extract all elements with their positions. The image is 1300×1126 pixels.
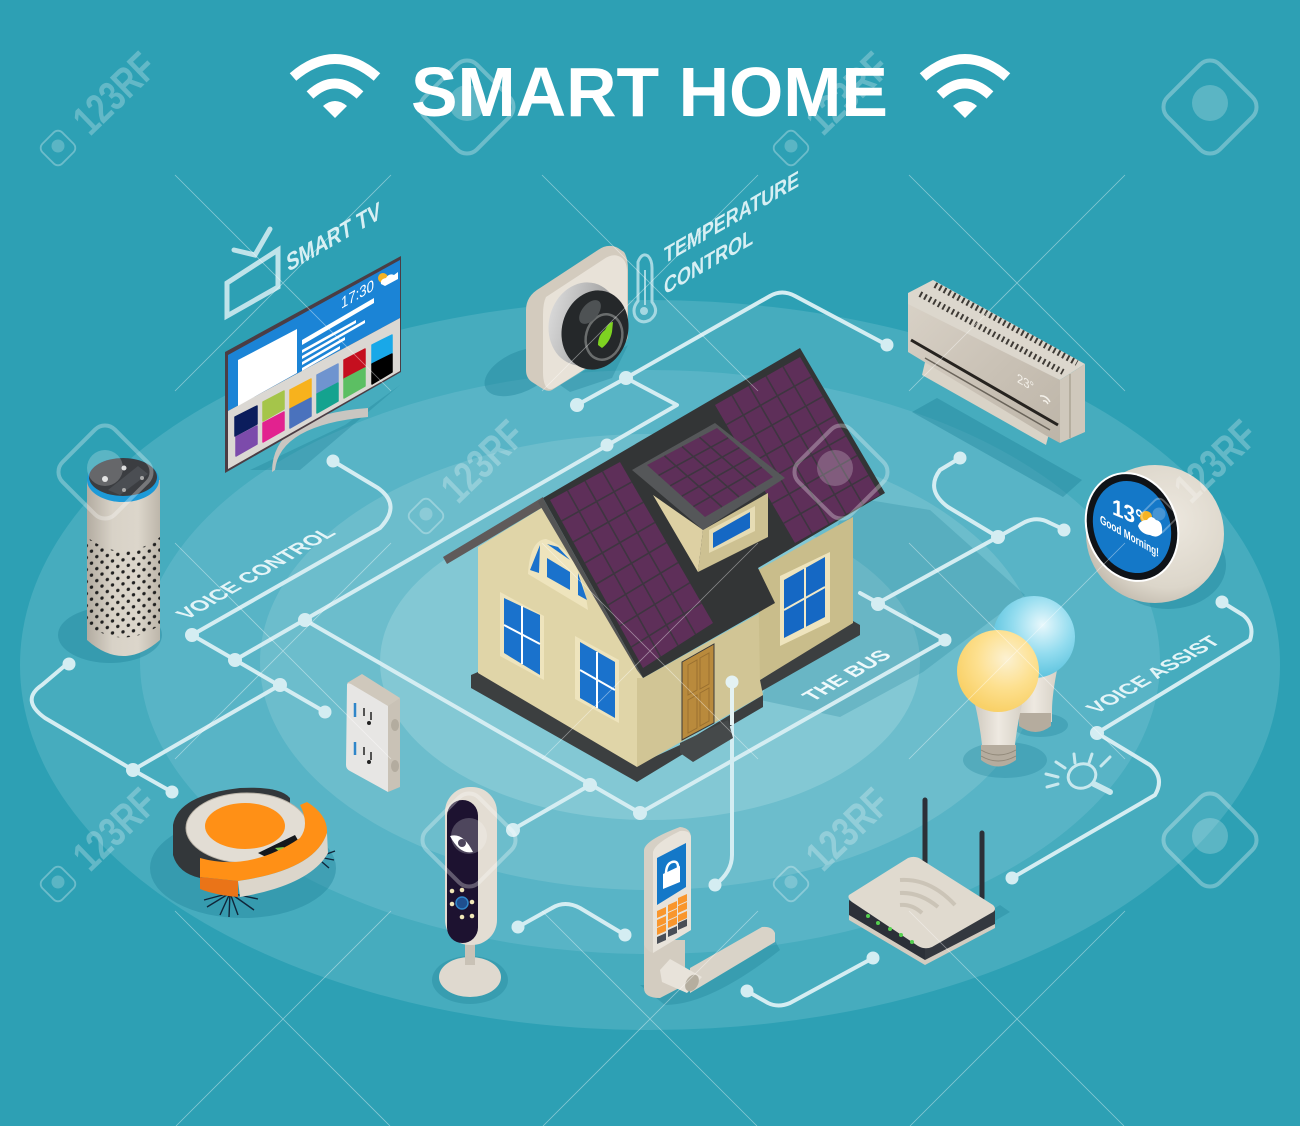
watermark: 123RF: 123RF bbox=[1165, 411, 1266, 511]
window bbox=[780, 552, 830, 646]
door bbox=[682, 644, 714, 740]
watermark: 123RF: 123RF bbox=[64, 779, 165, 879]
door dot bbox=[726, 676, 738, 688]
concentric floor ellipses bbox=[20, 300, 1280, 1030]
label: temperature control bbox=[664, 165, 799, 300]
device: smart display: Good Morning! bbox=[1100, 512, 1159, 560]
device: wall outlet bbox=[346, 674, 400, 792]
watermark: 123RF: 123RF bbox=[797, 779, 898, 879]
house bbox=[443, 348, 885, 782]
device: light bulb blue bbox=[993, 596, 1075, 737]
watermark: 123RF: 123RF bbox=[432, 411, 533, 511]
circuit lines bbox=[32, 292, 1251, 1006]
dormer bbox=[632, 423, 785, 572]
left roof eave bbox=[443, 497, 543, 564]
window bbox=[500, 592, 544, 680]
device: air conditioner: 23° bbox=[1017, 370, 1034, 395]
device: camera doorbell bbox=[432, 787, 508, 1004]
house walls bbox=[478, 507, 853, 767]
window bbox=[575, 636, 619, 723]
watermark logo centres bbox=[52, 85, 1228, 888]
device: smart display: 13° bbox=[1112, 493, 1143, 532]
watermark: 123RF bbox=[64, 43, 1266, 879]
label: the bus: THE BUS bbox=[797, 647, 897, 705]
device: thermostat bbox=[477, 246, 637, 406]
device: wifi router bbox=[848, 800, 1010, 965]
circuit nodes bbox=[62, 338, 1228, 998]
watermark: 123RF: 123RF bbox=[797, 43, 898, 143]
device: smart tv bbox=[225, 256, 401, 473]
device: light bulb yellow bbox=[957, 630, 1047, 778]
arched window bbox=[528, 539, 588, 610]
icon: wifi right bbox=[923, 59, 1007, 118]
house shadow bbox=[760, 497, 1025, 717]
diagonal watermark lines bbox=[175, 175, 1125, 1126]
title: SMART HOME bbox=[411, 53, 888, 131]
roof bbox=[538, 348, 885, 678]
device: smart door lock bbox=[640, 827, 780, 1005]
icon: thermometer bbox=[634, 255, 656, 322]
device: voice speaker bbox=[58, 458, 165, 663]
device: smart tv: 17:30 bbox=[341, 277, 374, 313]
label: temperature control: CONTROL bbox=[664, 222, 753, 300]
door steps bbox=[680, 720, 733, 762]
icon: wifi left bbox=[293, 59, 377, 118]
label: voice assist: VOICE ASSIST bbox=[1081, 633, 1226, 717]
icon: light search bbox=[1046, 754, 1110, 792]
device: robot vacuum bbox=[150, 788, 336, 918]
house foundation bbox=[471, 621, 860, 782]
label: smart tv: SMART TV bbox=[285, 197, 382, 278]
device: smart display bbox=[1070, 459, 1226, 609]
icon: tv outline bbox=[227, 229, 278, 316]
device: air conditioner bbox=[908, 280, 1085, 497]
watermark: 123RF: 123RF bbox=[64, 43, 165, 143]
label: voice control: VOICE CONTROL bbox=[171, 524, 341, 623]
watermark logos bbox=[38, 55, 1262, 904]
label: temperature control: TEMPERATURE bbox=[664, 165, 799, 269]
